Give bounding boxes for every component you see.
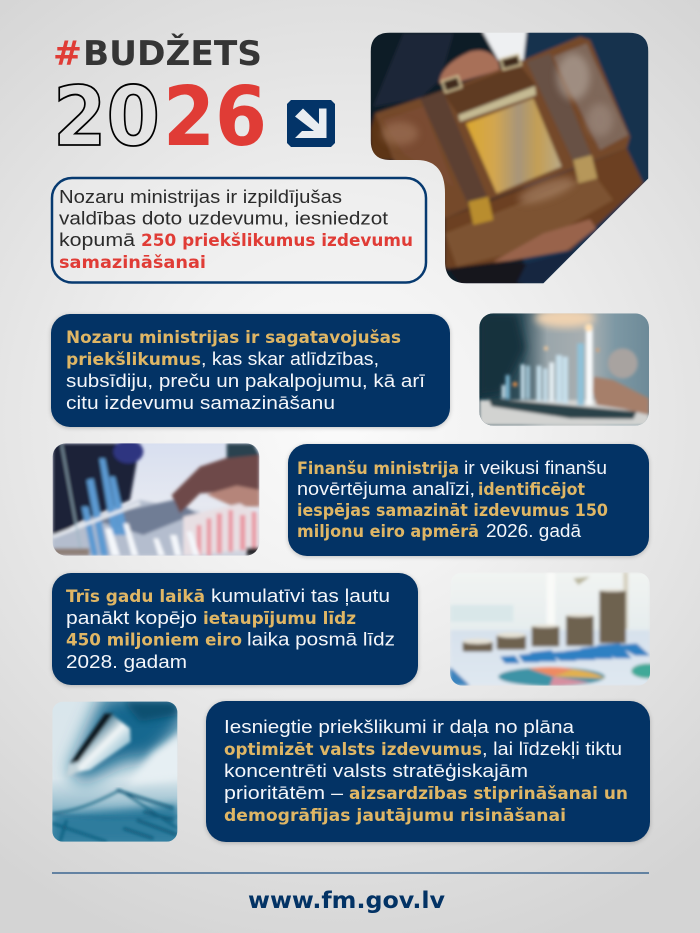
panel text: panākt kopējo [66,607,197,628]
panel text: ietaupījumu līdz [203,609,356,629]
callout text: valdības doto uzdevumu, iesniedzot [59,208,388,228]
panel: Ministry of Finance analysis [288,444,649,556]
panel text: novērtējuma analīzi, [297,478,475,499]
panel text [224,716,628,826]
photo: tablet with glowing bar chart [479,309,649,426]
panel text: ir veikusi finanšu [464,457,607,478]
panel background [288,444,649,556]
panel: three-year savings [52,573,418,685]
panel text: miljonu eiro apmērā [297,522,479,542]
callout text: kopumā [59,229,136,250]
panel text [297,457,608,542]
panel text: 2028. gadam [66,651,187,672]
title: year 2026 [53,70,267,165]
callout text: samazināšanai [59,253,206,273]
callout frame [52,178,426,282]
panel text: demogrāfijas jautājumu risināšanai [224,806,566,826]
title: year 2026: 26 [163,70,267,165]
photo: laptop keyboard with financial chart overlay [53,440,260,556]
panel text: subsīdiju, preču un pakalpojumu, kā arī [66,370,426,391]
callout text: Nozaru ministrijas ir izpildījušas [59,186,342,207]
panel background [52,573,418,685]
panel text [66,328,426,413]
callout text [59,186,413,273]
photo: growing coin stacks on a financial report [450,572,663,686]
panel background [206,701,650,842]
photo: briefcase held by a person in a suit [367,30,653,287]
panel text: optimizēt valsts izdevumus [224,740,482,760]
panel text: aizsardzības stiprināšanai un [349,784,628,804]
panel text: Iesniegtie priekšlikumi ir daļa no plāna [224,716,575,737]
footer: website address: www.fm.gov.lv [248,888,445,914]
panel text [66,585,395,672]
panel: ministries prepared proposals [51,314,450,427]
icon: arrow down-right [287,100,335,147]
panel text: 2026. gadā [486,520,582,541]
panel text: identificējot [478,480,585,500]
panel text: Trīs gadu laikā [66,587,205,607]
panel text: Finanšu ministrija [297,459,459,479]
photo: ballpoint pen on a printed chart [52,695,183,842]
panel text: laika posmā līdz [247,628,395,650]
callout text: 250 priekšlikumus izdevumu [141,231,413,251]
panel text: kumulatīvi tas ļautu [211,585,390,606]
panel text: priekšlikumus [66,350,201,370]
title: #BUDŽETS: BUDŽETS [83,33,262,74]
panel: plan to optimise state spending [206,701,650,842]
title: #BUDŽETS: # [53,34,82,74]
panel text: koncentrēti valsts stratēģiskajām [224,760,528,781]
panel text: , lai līdzekļi tiktu [482,738,622,759]
panel text: , kas skar atlīdzības, [201,348,379,369]
panel text: 450 miljoniem eiro [66,630,242,650]
panel text: Nozaru ministrijas ir sagatavojušas [66,328,401,348]
panel text: prioritātēm – [224,782,344,803]
panel text: iespējas samazināt izdevumus 150 [297,501,608,521]
panel: intro callout [52,178,426,282]
panel text: citu izdevumu samazināšanu [66,392,335,413]
panel background [51,314,450,427]
title: year 2026: 20 [53,70,160,165]
